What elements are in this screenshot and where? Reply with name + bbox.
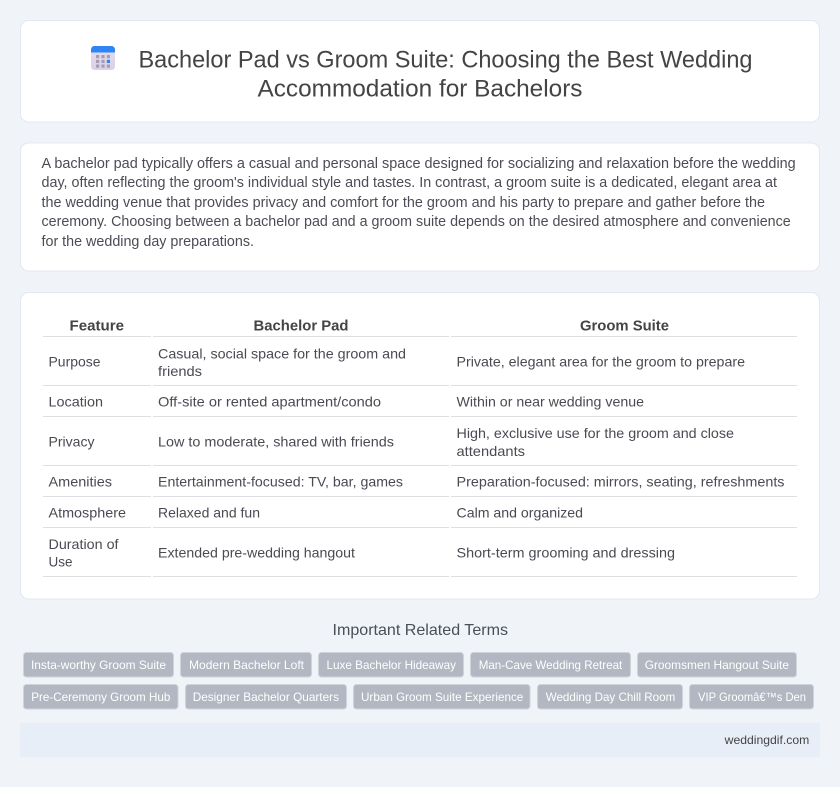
chip: Groomsmen Hangout Suite bbox=[645, 658, 789, 672]
table row: amenities: Entertainment-focused: TV, bar, games bbox=[158, 474, 403, 490]
table row: duration of use: Extended pre-wedding hangout bbox=[158, 545, 355, 561]
related terms chips bbox=[24, 652, 814, 709]
chip bbox=[638, 652, 796, 677]
table row: amenities bbox=[48, 474, 784, 490]
table header: Feature bbox=[70, 318, 124, 335]
table row: privacy bbox=[48, 425, 734, 459]
text block: description: the wedding venue that provides privacy and comfort for the groom and his party to prepare and gather before the bbox=[42, 195, 765, 211]
table header: Groom Suite bbox=[580, 318, 669, 335]
heading: important related terms: Important Related Terms bbox=[332, 622, 508, 639]
chip: Pre-Ceremony Groom Hub bbox=[31, 690, 171, 704]
table row: amenities: Amenities bbox=[48, 474, 112, 490]
text block: description: A bachelor pad typically offers a casual and personal space designed for socializing and relaxation before the wedding bbox=[42, 156, 796, 172]
footer bbox=[20, 723, 820, 757]
table row: purpose bbox=[48, 345, 745, 379]
footer: weddingdif.com bbox=[724, 733, 809, 747]
chip bbox=[180, 652, 312, 677]
table row: duration of use: Short-term grooming and dressing bbox=[456, 545, 675, 561]
panel: description bbox=[20, 143, 820, 271]
table row: purpose: friends bbox=[158, 363, 202, 379]
chip: Designer Bachelor Quarters bbox=[193, 690, 339, 704]
chip bbox=[318, 652, 464, 677]
text block: description bbox=[42, 156, 796, 250]
title bbox=[138, 46, 752, 102]
table row: privacy: Privacy bbox=[48, 434, 94, 450]
chip bbox=[354, 684, 530, 709]
text block: description: ceremony. Choosing between a bachelor pad and a groom suite depends on the desired atmosphere and convenience bbox=[42, 214, 791, 230]
text block: description: for the wedding day preparations. bbox=[42, 234, 254, 250]
table row: privacy: Low to moderate, shared with friends bbox=[158, 434, 394, 450]
chip: Man-Cave Wedding Retreat bbox=[479, 658, 623, 672]
table row: atmosphere: Atmosphere bbox=[48, 505, 126, 521]
chip: VIP Groomâ€™s Den bbox=[698, 690, 806, 704]
chip: Modern Bachelor Loft bbox=[189, 658, 305, 672]
chip: Insta-worthy Groom Suite bbox=[31, 658, 166, 672]
table header: Bachelor Pad bbox=[254, 318, 348, 335]
chip bbox=[24, 684, 178, 709]
chip: Urban Groom Suite Experience bbox=[361, 690, 524, 704]
chip bbox=[470, 652, 630, 677]
chip bbox=[24, 652, 174, 677]
table row: location: Within or near wedding venue bbox=[456, 394, 644, 410]
table row: duration of use: Use bbox=[48, 554, 73, 570]
chip bbox=[538, 684, 682, 709]
table row: location: Location bbox=[48, 394, 103, 410]
table row: atmosphere: Relaxed and fun bbox=[158, 505, 260, 521]
table row: privacy: attendants bbox=[456, 443, 525, 459]
chip bbox=[186, 684, 346, 709]
table row: purpose: Private, elegant area for the groom to prepare bbox=[456, 354, 745, 370]
table row: location: Off-site or rented apartment/condo bbox=[158, 394, 381, 410]
table row: atmosphere: Calm and organized bbox=[456, 505, 583, 521]
title: Bachelor Pad vs Groom Suite: Choosing the Best Wedding bbox=[138, 46, 752, 74]
panel: comparison table bbox=[20, 292, 820, 599]
table row: amenities: Preparation-focused: mirrors, seating, refreshments bbox=[456, 474, 784, 490]
table row: privacy: High, exclusive use for the groom and close bbox=[456, 425, 734, 441]
table row: location bbox=[48, 394, 644, 410]
table row: duration of use: Duration of bbox=[48, 536, 119, 552]
table row: atmosphere bbox=[48, 505, 583, 521]
chip: Wedding Day Chill Room bbox=[546, 690, 675, 704]
table row: duration of use bbox=[48, 536, 675, 570]
panel: header bbox=[20, 20, 820, 122]
title: Accommodation for Bachelors bbox=[258, 76, 582, 102]
text block: description: day, often reflecting the groom's individual style and tastes. In contrast, a groom suite is a dedicated, elegant area at bbox=[42, 175, 777, 191]
table row: purpose: Casual, social space for the groom and bbox=[158, 345, 406, 361]
chip bbox=[690, 684, 814, 709]
icon: calendar bbox=[91, 46, 115, 70]
table header bbox=[70, 318, 669, 335]
chip: Luxe Bachelor Hideaway bbox=[326, 658, 456, 672]
table row: purpose: Purpose bbox=[48, 354, 101, 370]
